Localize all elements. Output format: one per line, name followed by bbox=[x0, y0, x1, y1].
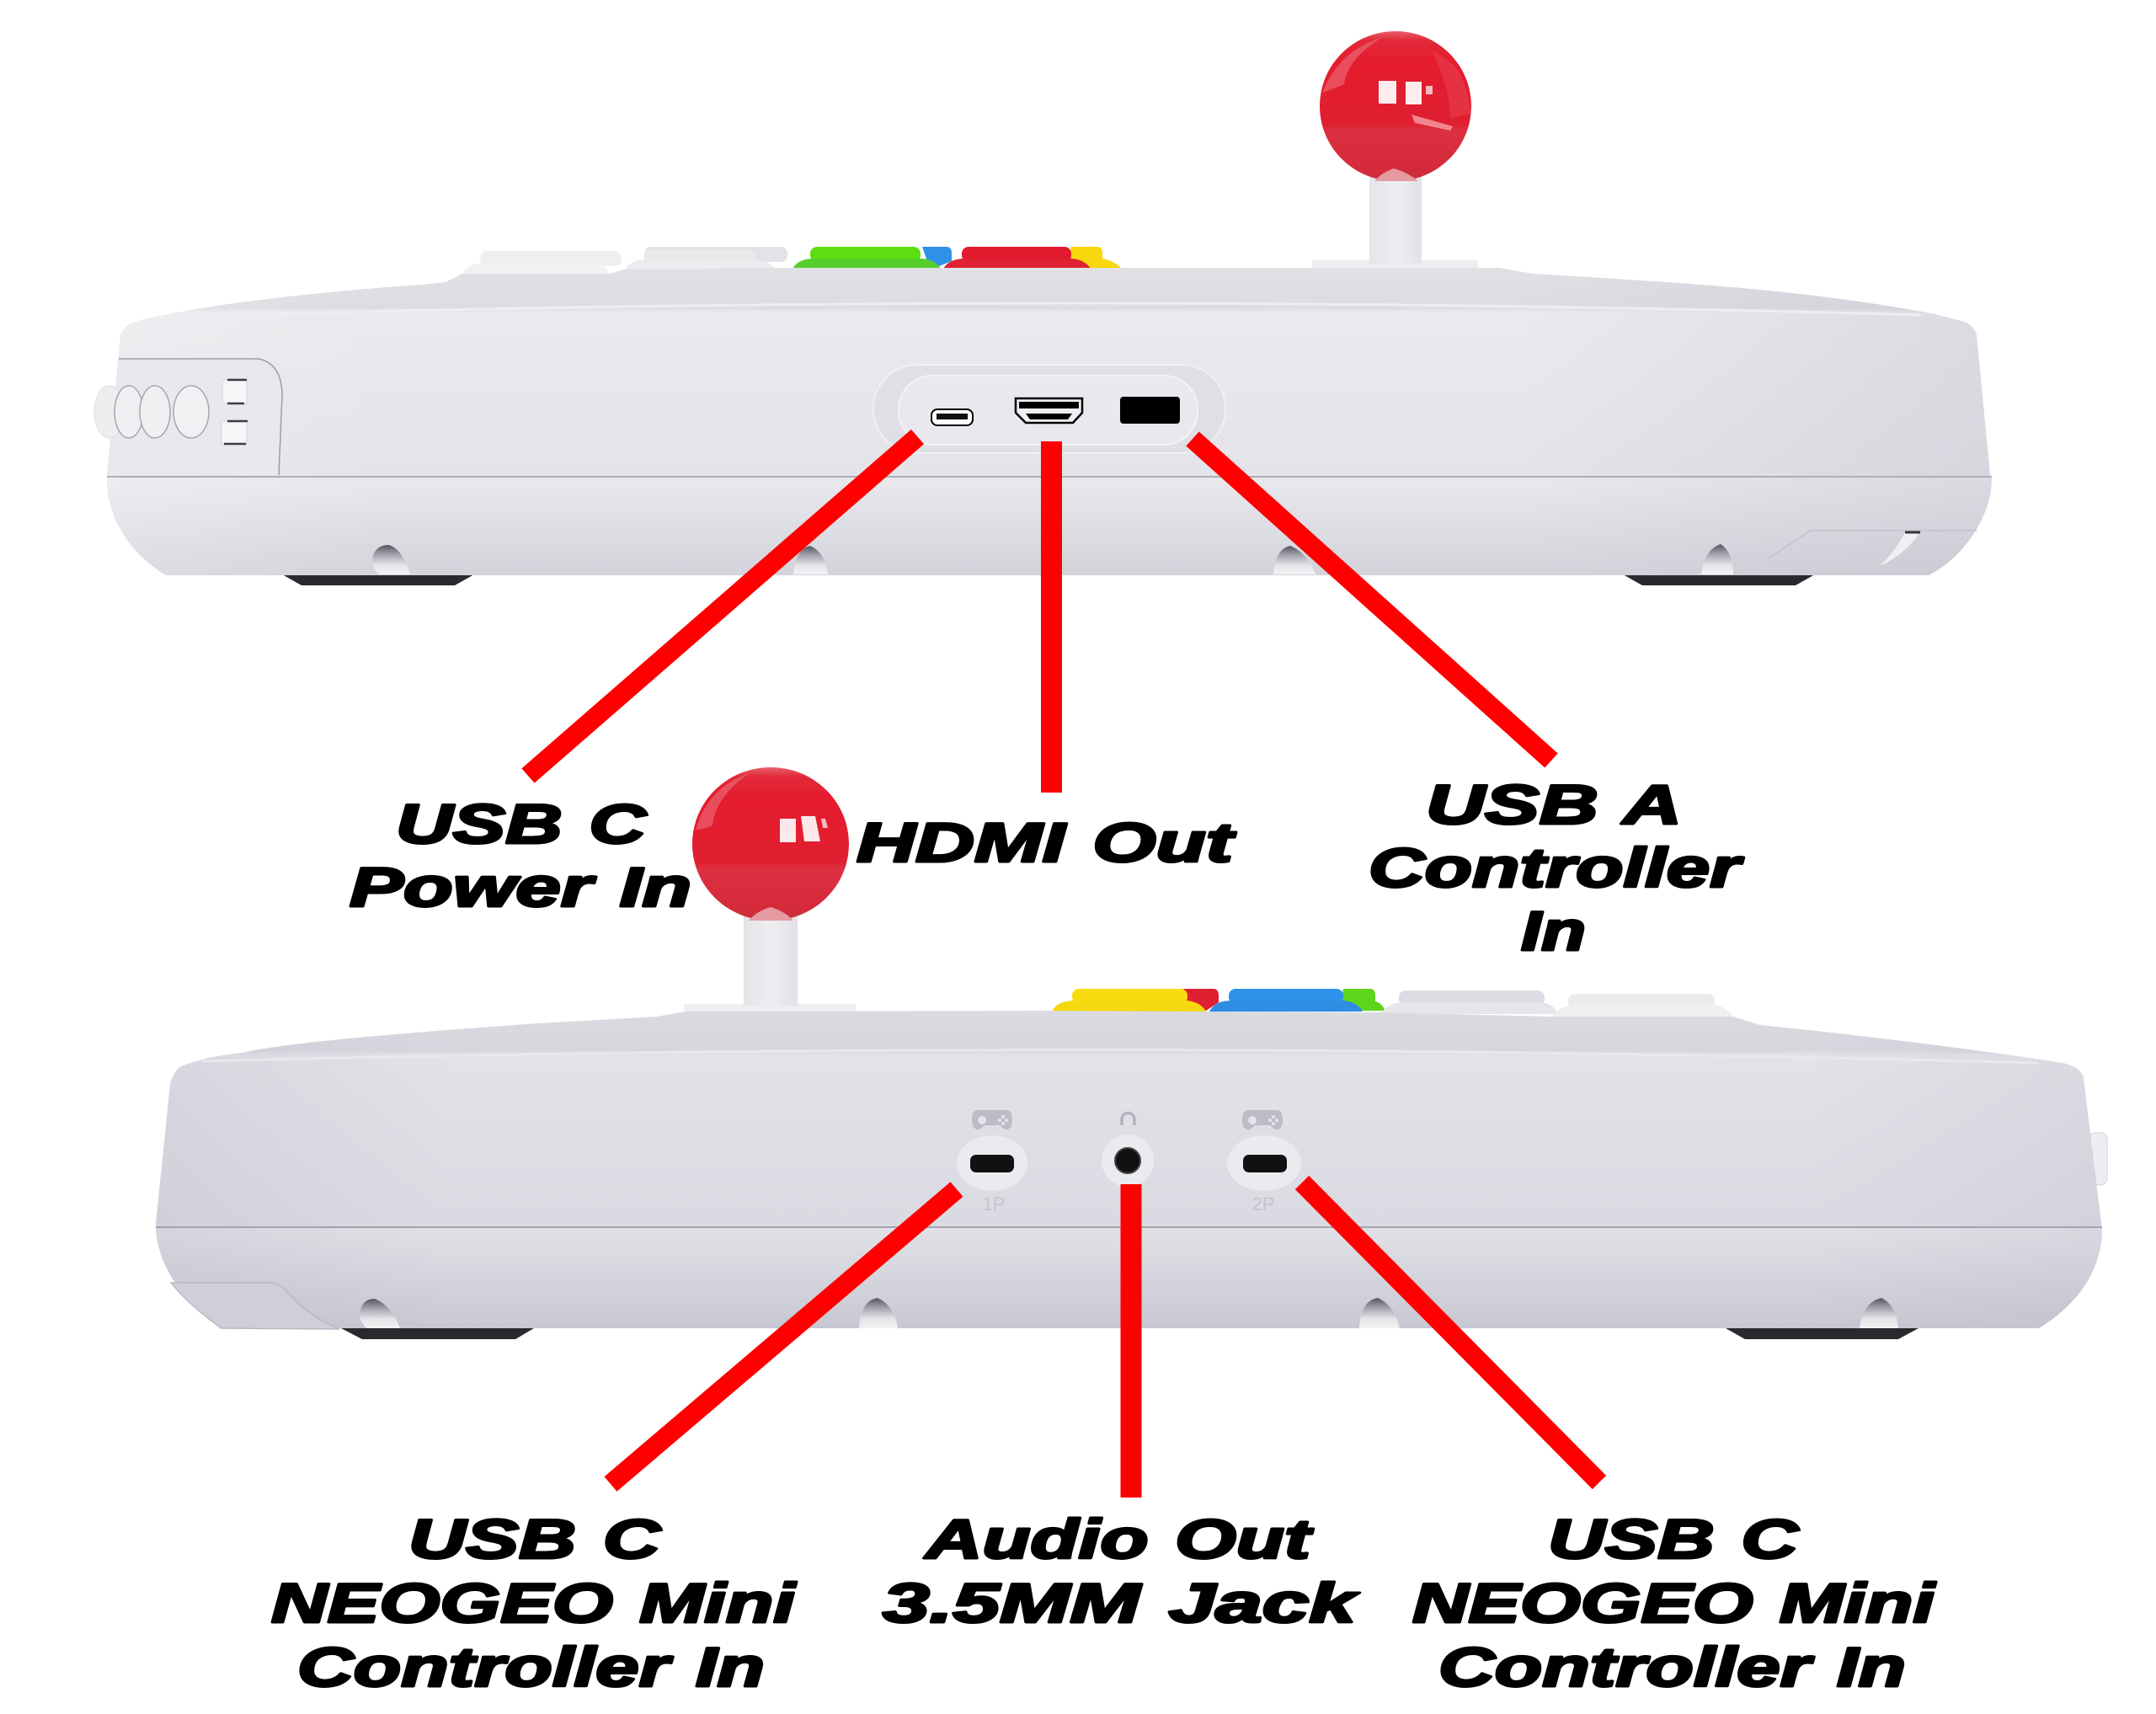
pointer: audio out bbox=[1120, 1184, 1142, 1498]
port: 1P USB C bbox=[957, 1135, 1027, 1191]
red button bbox=[943, 247, 1091, 269]
label: USB C NEOGEO Mini Controller In (1P): Controller In bbox=[297, 1636, 765, 1698]
label: USB C NEOGEO Mini Controller In (1P) bbox=[271, 1508, 797, 1698]
label: USB C Power In: USB C bbox=[396, 793, 648, 855]
label: USB A Controller In bbox=[1369, 773, 1744, 962]
label: USB C NEOGEO Mini Controller In (2P): Controller In bbox=[1438, 1636, 1906, 1698]
port recess bbox=[873, 365, 1225, 453]
label: 1P: 1P bbox=[983, 1193, 1005, 1215]
label: USB A Controller In: In bbox=[1521, 900, 1586, 962]
white button 4 bbox=[1551, 994, 1733, 1017]
yellow button bbox=[1052, 989, 1206, 1012]
green button bbox=[1339, 989, 1385, 1011]
port: USB A bbox=[1120, 397, 1180, 424]
battery cover detail bbox=[1769, 531, 1977, 566]
pointer: USB C power bbox=[528, 436, 918, 776]
label: Audio Out 3.5MM Jack: Audio Out bbox=[923, 1508, 1314, 1570]
port: 2P USB C bbox=[1227, 1135, 1301, 1191]
battery cover detail bbox=[171, 1283, 339, 1329]
icon: headphones bbox=[1122, 1113, 1134, 1125]
console body bbox=[156, 1011, 2102, 1328]
label: 2P: 2P bbox=[1252, 1193, 1274, 1215]
console body bbox=[107, 268, 1992, 575]
label: USB A Controller In: USB A bbox=[1426, 773, 1682, 836]
label: USB C NEOGEO Mini Controller In (2P) bbox=[1412, 1508, 1936, 1698]
pointer: USB A bbox=[1193, 439, 1551, 761]
joystick bbox=[684, 767, 856, 1012]
bottom screw notches bbox=[360, 1298, 1898, 1328]
bottom screw notches bbox=[372, 544, 1733, 574]
yellow button bbox=[1065, 247, 1122, 270]
label: Audio Out 3.5MM Jack: 3.5MM Jack bbox=[883, 1572, 1360, 1634]
label: USB A Controller In: Controller bbox=[1369, 836, 1744, 899]
label: USB C NEOGEO Mini Controller In (2P): USB C bbox=[1548, 1508, 1800, 1570]
pointer: 1P controller in bbox=[611, 1189, 957, 1484]
green button bbox=[792, 247, 941, 269]
pointer: HDMI out bbox=[1041, 441, 1062, 793]
label: USB C NEOGEO Mini Controller In (1P): NEOGEO Mini bbox=[271, 1572, 797, 1634]
blue button bbox=[914, 247, 952, 270]
icon: controller 2P bbox=[1242, 1110, 1283, 1129]
port: audio jack bbox=[1102, 1135, 1154, 1187]
label: Audio Out 3.5MM Jack bbox=[883, 1508, 1360, 1634]
rubber feet bbox=[282, 574, 1815, 585]
rubber feet bbox=[341, 1328, 1919, 1339]
joystick bbox=[1312, 31, 1478, 269]
label: USB C NEOGEO Mini Controller In (2P): NEOGEO Mini bbox=[1412, 1572, 1936, 1634]
white button 1 bbox=[462, 251, 622, 275]
pointer: 2P controller in bbox=[1302, 1183, 1599, 1482]
white button 2 bbox=[624, 247, 787, 271]
top controller: rear view bbox=[94, 31, 1992, 585]
icon: controller 1P bbox=[972, 1110, 1012, 1129]
label: USB C Power In: Power In bbox=[350, 856, 691, 918]
blue button bbox=[1209, 989, 1363, 1012]
white button 3 bbox=[1380, 990, 1558, 1014]
port: USB C power bbox=[931, 409, 973, 425]
buttons row bbox=[462, 247, 1122, 275]
red button bbox=[1179, 989, 1219, 1011]
label: HDMI Out: HDMI Out bbox=[857, 811, 1236, 873]
label: USB C Power In bbox=[350, 793, 691, 918]
side nub bbox=[2089, 1133, 2107, 1185]
bottom controller: front view bbox=[156, 767, 2107, 1339]
label: USB C NEOGEO Mini Controller In (1P): USB C bbox=[408, 1508, 662, 1570]
side control panel bbox=[94, 359, 282, 475]
buttons row bbox=[1052, 989, 1733, 1017]
port: HDMI bbox=[1016, 398, 1082, 423]
